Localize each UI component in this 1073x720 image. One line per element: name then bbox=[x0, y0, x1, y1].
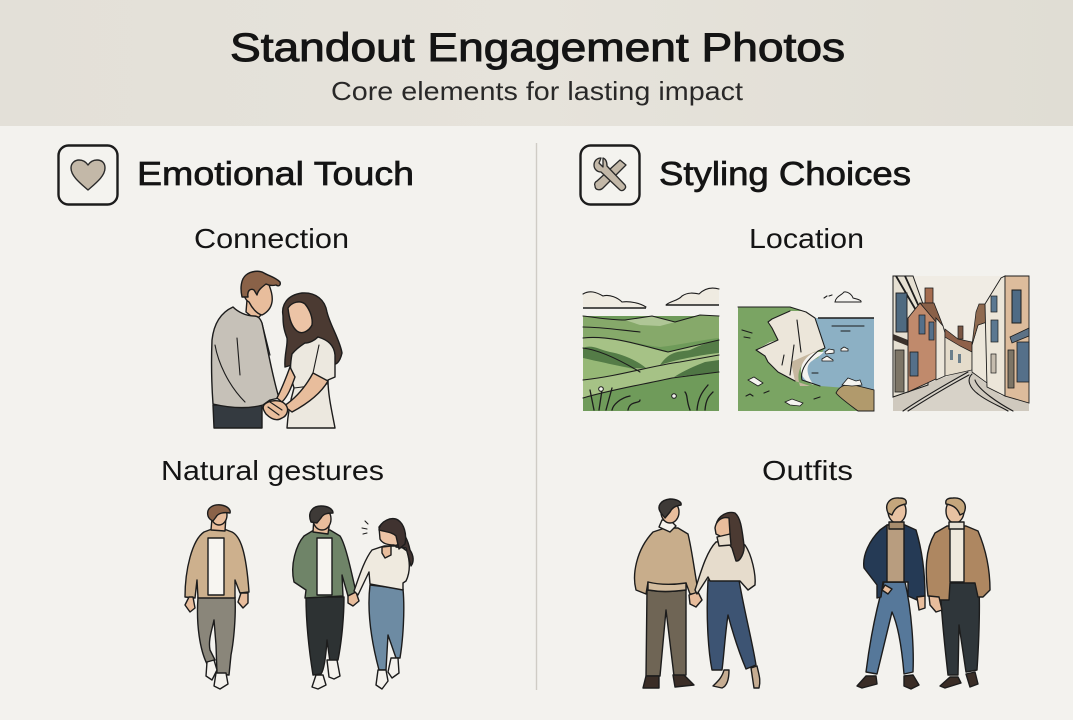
heading: emotional touch: Emotional Touch bbox=[137, 155, 414, 192]
icon: wrench and screwdriver bbox=[580, 146, 640, 204]
cream house bbox=[936, 318, 945, 380]
header banner bbox=[0, 0, 1073, 126]
title: Standout Engagement Photos bbox=[230, 26, 845, 70]
illustration: couple holding hands bbox=[212, 271, 342, 428]
illustration: rolling hills bbox=[583, 288, 719, 411]
subheading: natural gestures: Natural gestures bbox=[161, 455, 384, 486]
illustration: old town street bbox=[893, 276, 1029, 411]
panel: styling choices bbox=[580, 146, 1029, 689]
brick house bbox=[908, 303, 938, 392]
distant houses bbox=[945, 334, 972, 376]
subheading: location: Location bbox=[749, 223, 864, 254]
subheading: connection: Connection bbox=[194, 223, 349, 254]
illustration: coastal cliffs bbox=[738, 292, 874, 411]
illustration: blazer friends bbox=[857, 498, 990, 689]
icon: heart bbox=[58, 146, 118, 204]
subtitle: Core elements for lasting impact bbox=[331, 76, 744, 106]
illustration: couple walking and laughing bbox=[293, 506, 413, 689]
left timbered house bbox=[893, 276, 928, 397]
heading: styling choices: Styling Choices bbox=[659, 155, 911, 192]
right houses bbox=[972, 322, 987, 383]
illustration: man walking alone bbox=[185, 505, 249, 689]
illustration: sweater couple bbox=[635, 499, 760, 688]
panel: emotional touch bbox=[58, 146, 414, 689]
subheading: outfits: Outfits bbox=[762, 455, 853, 486]
